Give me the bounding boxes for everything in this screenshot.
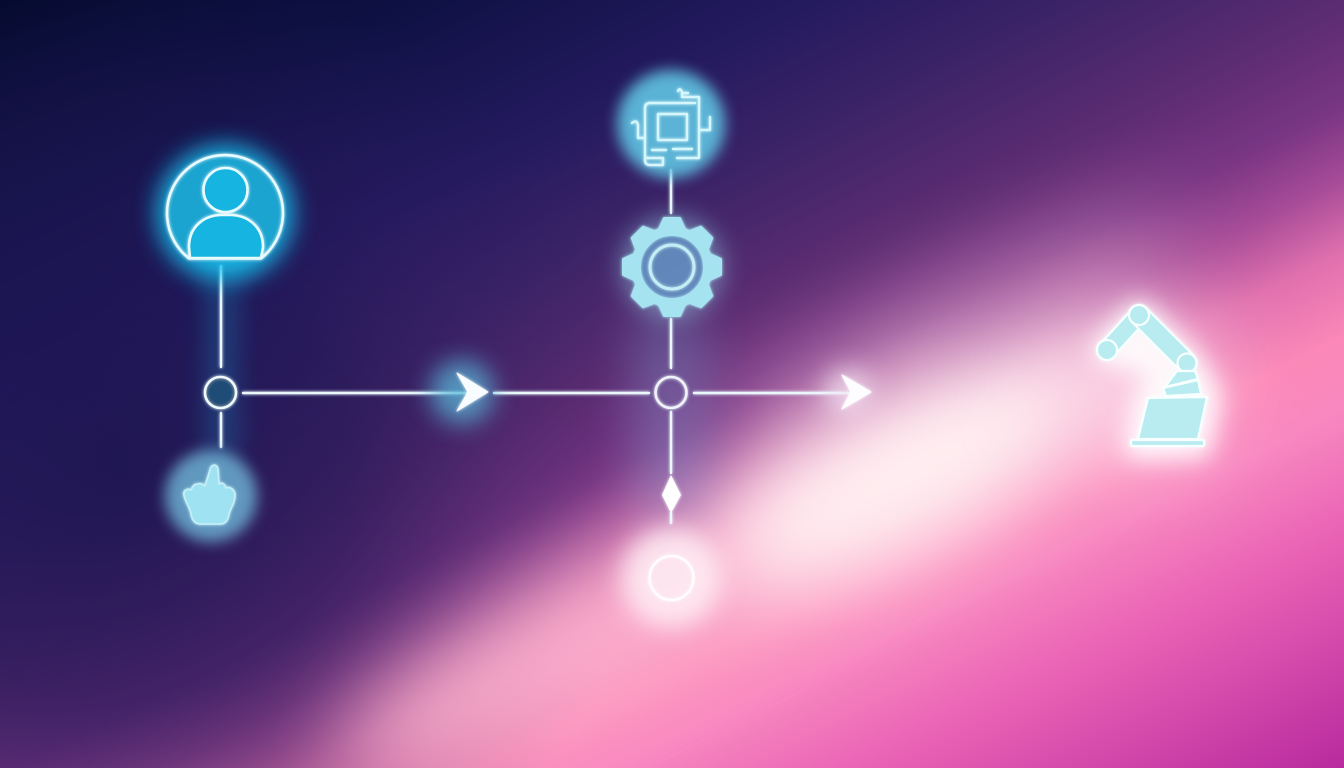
node: left junction [205,377,236,408]
icon: pointing hand [165,450,257,542]
icon: user profile [157,145,293,281]
icon: gear [620,215,724,319]
icon: robot arm [1097,305,1207,446]
column glows [205,270,710,520]
icon: chip robot [617,70,725,178]
arrow: second arrowhead with glow [824,368,872,416]
arrow: first arrowhead with glow [430,360,494,424]
icon: diamond marker [662,475,681,513]
connector lines [221,170,850,523]
node: center junction [656,377,686,408]
node: bottom glowing circle [621,528,721,628]
